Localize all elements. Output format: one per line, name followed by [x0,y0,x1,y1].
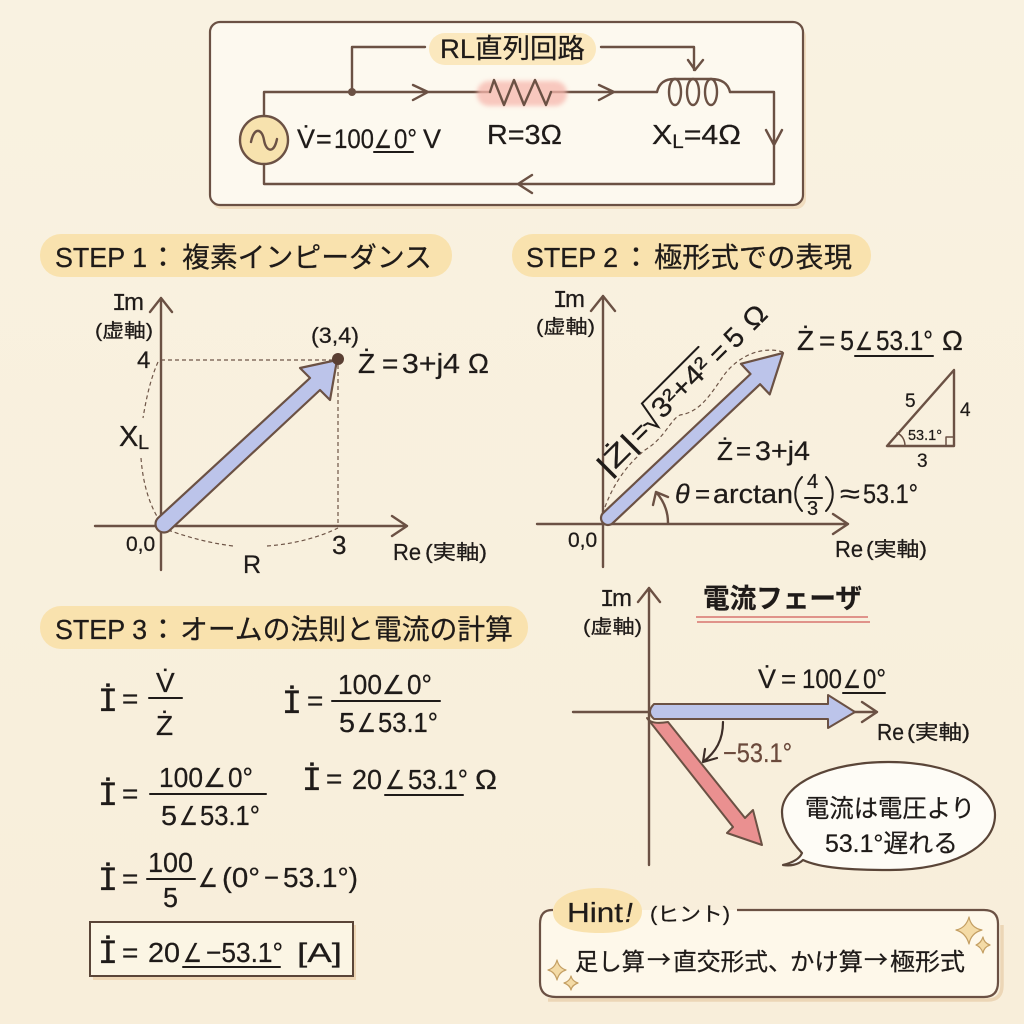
formula: second fraction: İ [98,778,118,816]
polar result: Ω [942,325,963,356]
axis labels: (実軸) [866,538,927,561]
voltage arrow [650,695,855,728]
chart: complex impedance plane [95,289,489,579]
reference triangle: 5 [905,391,916,412]
theta formula: θ [675,479,690,509]
phasor labels: ∠ [843,665,861,694]
magnitude formula: Ω [736,298,773,336]
heading: step 3: オームの法則と電流の計算 [180,614,513,645]
formula: substituted fraction: 0° [407,669,432,700]
formula: angle subtraction [98,847,358,913]
labels: Ω [468,348,489,379]
rectangular form: = [736,436,751,466]
axis labels: Re [835,536,863,562]
theta formula: = [695,479,710,509]
point [332,353,344,365]
final result box: İ [98,936,118,974]
axis labels [536,286,927,562]
icon: sparkles [548,917,990,990]
hint text: → [647,940,671,975]
labels: = [382,348,398,379]
formula: second fraction [98,762,266,832]
formula: second fraction: ∠ [203,764,226,794]
heading: step 1 [40,234,452,277]
phasor labels: = [781,664,796,694]
formula: second fraction: 0° [228,762,253,793]
axis labels: I [553,288,567,315]
axis labels: (虚軸) [536,316,595,338]
heading: step 2: ： [622,242,650,273]
hint text [575,940,965,976]
phasor labels: (実軸) [907,721,970,744]
labels: 3+j4 [402,348,460,379]
final result box [90,922,356,980]
hint badge [553,888,642,933]
callout [782,762,995,870]
callout: 53.1°遅れる [825,830,958,858]
reactance label: =4Ω [684,119,741,150]
projection lines [141,360,338,546]
phasor labels: −53.1° [723,738,792,768]
labels: R [243,551,261,579]
voltage label: V̇ [297,124,315,154]
hint text: → [864,940,888,975]
phasor labels: I [600,587,614,614]
angle arc [703,722,723,762]
theta formula: arctan [713,479,793,509]
theta formula: 53.1° [863,479,918,509]
formula: substituted fraction: ∠ [382,671,405,701]
heading: step 1: STEP 1 [55,242,147,273]
phasor title: 電流フェーザ [703,584,862,614]
phasor labels: V̇ [758,664,776,694]
voltage label: ∠ [374,125,392,154]
formula: second fraction: 5 [161,800,177,831]
labels: 0,0 [126,533,155,556]
current arrow [647,718,762,845]
heading: step 3: ： [149,614,177,645]
rectangular form: Ż [717,436,733,466]
voltage label [297,124,441,154]
circuit wiring [264,47,782,193]
reference triangle: 53.1° [908,427,942,444]
panel: hint [540,888,1002,1000]
resistance label: R=3Ω [487,119,562,150]
polar result: 53.1° [876,325,933,356]
phasor labels: 0° [863,664,886,694]
formula: angle subtraction: 100 [148,847,193,878]
heading: step 2: 極形式での表現 [654,242,852,273]
hint text: 足し算 [575,949,645,976]
formula: intermediate result: İ [302,763,322,801]
labels: (実軸) [425,541,487,564]
labels: I [112,291,126,318]
final result box: [A] [297,938,342,968]
impedance arrow [601,353,783,525]
formula: intermediate result: = [326,763,342,794]
heading: step 2 [512,234,871,277]
formula: substituted fraction: 5 [339,707,355,738]
labels: Ż [358,348,375,379]
hint subtitle: (ヒント) [650,904,730,926]
AC source [240,116,288,164]
labels: 4 [137,347,150,374]
theta formula: 4 [807,471,818,493]
reference triangle: 4 [960,400,971,421]
formula: substituted fraction: 100 [338,669,382,700]
formula: second fraction: 53.1° [200,800,260,831]
magnitude formula [588,296,773,481]
formula: substituted fraction: = [307,685,323,716]
phasor labels: m [612,585,632,612]
formula: current definition: = [122,683,138,714]
polar result: 5 [840,325,854,356]
labels: (3,4) [311,323,359,348]
formula: angle subtraction: 53.1°) [283,862,358,893]
magnitude formula: 3²+4² [645,351,718,424]
magnitude dashed curve [605,350,783,507]
rectangular form: 3+j4 [755,436,810,466]
phasor labels: 100 [802,664,842,694]
formula: second fraction: = [122,778,138,809]
resistor [477,80,567,106]
theta formula [675,471,918,520]
formula: substituted fraction: 53.1° [378,707,438,738]
polar result: = [819,325,835,356]
phasor labels: Re [877,719,904,745]
polar result: Ż [797,325,814,356]
final result box: 20 [148,937,180,968]
magnitude formula: = [623,415,656,449]
formula: current definition: İ [98,684,118,722]
formula: angle subtraction: İ [98,863,118,901]
inductor [657,79,730,105]
callout: 電流は電圧より [805,795,975,823]
polar result: ∠ [855,327,873,356]
final result box: −53.1° [206,937,283,968]
formula: substituted fraction: İ [282,686,302,724]
labels: m [124,289,144,316]
formula: angle subtraction: 5 [163,882,178,913]
hint text: 、 [768,949,792,976]
labels: Re [393,539,421,565]
axes [573,588,877,865]
hint badge: ! [625,897,633,928]
phasor labels [583,585,970,768]
impedance arrow [156,360,337,532]
reference triangle [887,370,971,472]
magnitude formula: |Ż| [590,428,643,481]
circuit title: RL直列回路 [440,34,585,64]
voltage label: 100 [334,124,374,154]
chart: polar form [536,286,971,567]
formula: intermediate result: 20 [352,764,382,795]
axis labels: 0,0 [568,529,597,552]
voltage label: = [316,124,332,154]
labels [95,289,489,579]
labels: (虚軸) [95,320,153,342]
angle arc [653,492,668,523]
heading: step 2: STEP 2 [526,242,618,273]
chart: current phasor [573,584,995,870]
magnitude formula: 5 [718,321,751,354]
phasor labels: (虚軸) [583,616,642,638]
formula: angle subtraction: = [122,863,138,894]
formula: intermediate result: Ω [475,764,497,795]
formula: current definition [98,667,182,741]
formula: second fraction: 100 [159,762,203,793]
formula: intermediate result: ∠ [385,766,405,796]
formula: substituted fraction [282,669,440,739]
labels: 3 [332,530,346,560]
axis labels: m [565,286,585,313]
formula: angle subtraction: ∠ [198,864,218,894]
formula: intermediate result [302,763,497,801]
theta formula: 3 [807,498,818,520]
heading: step 3: STEP 3 [55,614,147,645]
formula: current definition: Ż [156,710,173,741]
axes [537,296,848,567]
formula: substituted fraction: ∠ [357,709,376,739]
labels: X [119,421,138,453]
hint badge: Hint [567,897,623,928]
formula: intermediate result: 53.1° [408,764,468,795]
formula: angle subtraction: (0° [222,862,260,893]
reactance label: L [672,132,684,153]
heading: step 3 [40,606,528,649]
reference triangle: 3 [917,451,928,472]
heading: step 1: 複素インピーダンス [182,242,432,273]
magnitude formula: = [702,336,736,370]
hint text: かけ算 [790,949,863,976]
rectangular form [717,436,810,466]
formula: angle subtraction: − [264,862,279,893]
voltage label: 0° [394,124,417,154]
labels: L [138,432,149,454]
formula: current definition: V̇ [156,667,175,698]
junction dot [348,88,356,96]
voltage label: V [423,124,441,154]
final result box: ∠ [183,939,202,969]
formula: second fraction: ∠ [179,802,198,832]
axes [95,298,407,570]
polar result [797,325,963,356]
reactance label: X [652,119,671,150]
heading: step 1: ： [149,242,177,273]
hint text: 極形式 [890,949,965,976]
final result box: = [122,937,138,968]
panel: RL series circuit [210,22,806,209]
hint text: 直交形式 [673,949,768,976]
theta formula: ≈ [840,479,860,509]
